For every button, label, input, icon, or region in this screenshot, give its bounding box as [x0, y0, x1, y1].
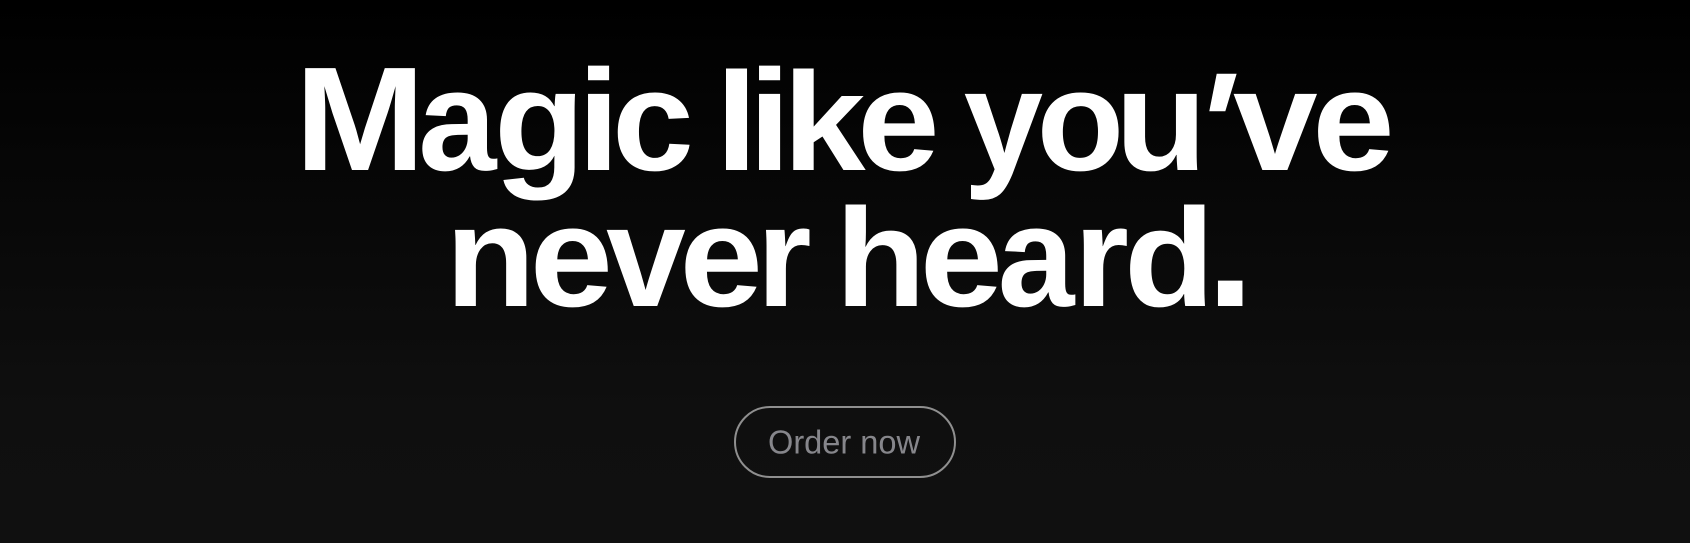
title: second line: n	[445, 176, 536, 337]
title: second line: d	[1124, 179, 1215, 336]
title: second line: h	[835, 179, 926, 336]
title: second line: r	[1074, 176, 1129, 337]
title: second line: a	[998, 176, 1075, 337]
title: first line: e	[1312, 40, 1395, 201]
title: first line: M	[295, 37, 425, 202]
button: order now	[735, 407, 955, 477]
title: first line: y	[964, 40, 1043, 201]
title: first line: c	[612, 40, 694, 201]
title: second line	[445, 153, 1254, 343]
title: first line: v	[1233, 40, 1318, 201]
title: second line: e	[530, 176, 613, 337]
title: first line: o	[1037, 40, 1124, 201]
title: first line: k	[783, 43, 866, 200]
title: second line: e	[680, 176, 763, 337]
title: first line: g	[494, 40, 585, 201]
title: first line: i	[577, 40, 620, 201]
title: first line: a	[418, 40, 497, 201]
title: first line: l	[715, 43, 758, 200]
title: first line: u	[1115, 40, 1207, 201]
title: first line: e	[857, 40, 940, 201]
title: second line: .	[1206, 153, 1254, 343]
title: first line	[295, 37, 1395, 209]
title: second line: v	[606, 176, 686, 337]
title: first line: '	[1175, 42, 1252, 209]
title: second line: e	[920, 176, 1003, 337]
title: second line: r	[757, 176, 812, 337]
button: order now: Order now	[768, 424, 920, 460]
title: first line: i	[748, 40, 791, 201]
